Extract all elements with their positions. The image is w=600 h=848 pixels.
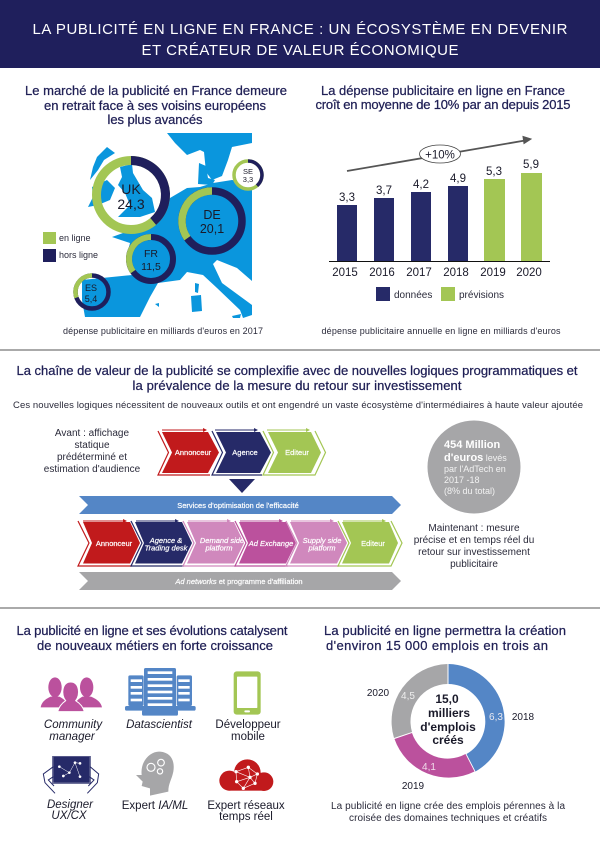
heading: jobs: [324, 623, 566, 653]
bar chart: 4,9: [450, 173, 466, 185]
text: avant: [44, 428, 141, 475]
callout: 454 million: (8% du total): [444, 486, 495, 496]
callout: 454 million: [428, 420, 520, 514]
chevron: Annonceur: [158, 428, 219, 475]
label: network expert: temps réel: [219, 811, 273, 823]
chevron: Supply side platform: [286, 519, 347, 566]
label: community manager: Community: [44, 719, 103, 731]
heading: professions: de nouveaux métiers en forte croissance: [37, 638, 273, 653]
header banner: [0, 0, 600, 68]
icon: datascientist: [125, 668, 196, 716]
donut labels: 2020: [367, 688, 390, 699]
ring: FR: 11,5: [141, 261, 161, 273]
text: maintenant: publicitaire: [450, 559, 498, 570]
ring: FR: [129, 237, 173, 281]
ring: UK: [96, 160, 166, 230]
growth arrow +10%: +10%: [425, 150, 455, 162]
heading: professions: [16, 623, 288, 653]
ring: SE: SE: [243, 167, 253, 176]
ring: UK: UK: [121, 181, 141, 197]
chevron: Ad Exchange: Ad Exchange: [248, 539, 293, 548]
callout: 454 million: 2017 -18: [444, 475, 480, 485]
bar chart: 5,9: [523, 159, 539, 171]
callout: 454 million: par l'AdTech en: [444, 464, 506, 474]
icon: AI head: [136, 752, 174, 796]
chevron: Supply side platform: platform: [307, 544, 336, 552]
map of Europe: [82, 133, 252, 318]
chevron: Agence & Trading desk: Agence &: [149, 536, 182, 545]
heading: market: [25, 83, 287, 127]
caption: bars: dépense publicitaire annuelle en ligne en milliards d'euros: [322, 326, 561, 336]
header banner: ET CRÉATEUR DE VALEUR ÉCONOMIQUE: [142, 42, 458, 59]
panel: new professions: [16, 623, 288, 823]
chain: after: [78, 519, 402, 566]
text: avant: Avant : affichage: [55, 428, 129, 439]
heading: market: Le marché de la publicité en France demeure: [25, 83, 287, 98]
chevron: Agence & Trading desk: [131, 519, 192, 566]
caption: map: dépense publicitaire en milliards d'euros en 2017: [63, 326, 263, 336]
icon: network cloud: [219, 759, 273, 791]
caption: donut: croisée des domaines techniques et créatifs: [349, 813, 547, 824]
donut chart: 6,3: [489, 712, 503, 723]
bar chart: 2016: [369, 267, 395, 279]
ring: ES: ES: [85, 283, 97, 293]
bar chart: 2015: [332, 267, 358, 279]
donut labels: [367, 688, 535, 792]
heading: professions: La publicité en ligne et ses évolutions catalysent: [16, 623, 288, 638]
icon: community manager: [41, 677, 102, 712]
chevron: Editeur: Editeur: [361, 539, 385, 548]
legend: bars: prévisions: [459, 290, 504, 301]
legend: map: hors ligne: [59, 250, 98, 260]
chevron: Demand side platform: Demand side: [200, 536, 244, 545]
ring: DE: DE: [203, 208, 221, 222]
label: network expert: Expert réseaux: [207, 800, 285, 812]
header banner: LA PUBLICITÉ EN LIGNE EN FRANCE : UN ÉCOSYSTÈME EN DEVENIR: [32, 21, 568, 38]
heading: jobs: d'environ 15 000 emplois en trois an: [326, 638, 548, 653]
bar chart: 3,3: [339, 192, 355, 204]
ring: SE: 3,3: [243, 175, 253, 184]
bar chart: 5,3: [486, 166, 502, 178]
donut labels: 2018: [512, 712, 535, 723]
donut chart: milliers: [428, 706, 470, 720]
caption: donut: La publicité en ligne crée des emplois pérennes à la: [331, 801, 565, 812]
chevron: Editeur: [338, 519, 402, 566]
donut labels: 2019: [402, 781, 425, 792]
ring: DE: 20,1: [200, 222, 224, 236]
label: datascientist: Datascientist: [126, 719, 193, 731]
heading: market: en retrait face à ses voisins européens: [44, 98, 266, 113]
donut chart: 4,5: [401, 691, 415, 702]
callout: 454 million: d'euros levés: [444, 452, 507, 464]
ring: UK: 24,3: [117, 196, 145, 212]
subheading: value chain: Ces nouvelles logiques nécessitent de nouveaux outils et ont engendré un vaste écosystème d'intermédiaires à haute valeur ajoutée: [13, 400, 583, 411]
ring: FR: FR: [144, 248, 158, 260]
bar chart: 4,2: [413, 179, 429, 191]
chevron: Agence: [212, 428, 271, 475]
label: AI expert: Expert IA/ML: [122, 800, 188, 812]
chevron: Agence: Agence: [232, 448, 258, 457]
chevron: Editeur: Editeur: [285, 448, 309, 457]
chevron: Supply side platform: Supply side: [303, 536, 341, 545]
legend: map: [43, 232, 98, 262]
label: mobile: Développeur: [215, 719, 281, 731]
text: avant: estimation d'audience: [44, 464, 141, 475]
donut chart: [392, 664, 505, 778]
band: optimisation services: [79, 496, 401, 514]
legend: map: en ligne: [59, 233, 91, 243]
ring: ES: [76, 276, 108, 308]
bar chart: 2018: [443, 267, 469, 279]
bar chart: 2020: [516, 267, 542, 279]
callout: 454 million: 454 Million: [444, 439, 501, 451]
panel: jobs donut: [324, 623, 566, 824]
chevron: Editeur: [263, 428, 326, 475]
band: ad networks: [79, 572, 401, 590]
label: designer: Designer: [47, 799, 94, 811]
chevron: Ad Exchange: [235, 519, 296, 566]
panel: spending bar chart: [316, 83, 570, 336]
heading: value chain: la prévalence de la mesure du retour sur investissement: [132, 378, 462, 393]
text: avant: statique: [74, 440, 110, 451]
label: community manager: manager: [49, 731, 96, 743]
band: optimisation services: Services d'optimisation de l'efficacité: [177, 501, 299, 510]
label: designer: [47, 799, 94, 822]
legend: bars: données: [394, 290, 432, 301]
label: mobile: mobile: [231, 731, 265, 743]
label: network expert: [207, 800, 285, 823]
caption: donut: [331, 801, 565, 824]
band: ad networks: Ad networks et programme d'affiliation: [174, 577, 303, 586]
heading: value chain: [16, 363, 578, 393]
label: designer: UX/CX: [51, 810, 88, 822]
chain: before: [158, 428, 326, 475]
growth arrow +10%: [347, 136, 531, 171]
donut chart: 4,1: [422, 762, 436, 773]
icon: designer tablet: [43, 756, 99, 793]
label: mobile: [215, 719, 281, 743]
chevron: Annonceur: [78, 519, 140, 566]
text: maintenant: retour sur investissement: [418, 547, 530, 558]
chevron: Demand side platform: [183, 519, 244, 566]
ring: DE: [182, 191, 242, 251]
heading: spending: croît en moyenne de 10% par an depuis 2015: [316, 97, 570, 112]
chevron: Agence & Trading desk: Trading desk: [145, 544, 189, 552]
heading: spending: [316, 83, 570, 112]
bar chart: 2017: [406, 267, 432, 279]
text: avant: prédéterminé et: [57, 452, 127, 463]
label: community manager: [44, 719, 103, 743]
panel: European market map: [25, 83, 287, 336]
heading: market: les plus avancés: [108, 112, 203, 127]
chevron: Annonceur: Annonceur: [175, 448, 212, 457]
icon: mobile: [234, 671, 261, 715]
donut chart: créés: [432, 733, 464, 747]
panel: value chain: [13, 363, 583, 590]
ring: SE: [234, 161, 262, 189]
donut chart: d'emplois: [420, 720, 476, 734]
chevron: Demand side platform: platform: [204, 544, 233, 552]
legend: bars: [376, 287, 504, 301]
bar chart: [329, 159, 550, 279]
text: maintenant: [414, 523, 534, 570]
bar chart: 3,7: [376, 185, 392, 197]
heading: spending: La dépense publicitaire en ligne en France: [321, 83, 565, 98]
arrow: transition down: [229, 479, 255, 493]
text: maintenant: précise et en temps réel du: [414, 535, 534, 546]
ring: ES: 5,4: [85, 294, 97, 304]
heading: value chain: La chaîne de valeur de la publicité se complexifie avec de nouvelles logiques programmatiques et: [16, 363, 578, 378]
bar chart: 2019: [480, 267, 506, 279]
heading: jobs: La publicité en ligne permettra la création: [324, 623, 566, 638]
donut chart: 15,0: [435, 692, 459, 706]
chevron: Annonceur: Annonceur: [96, 539, 133, 548]
text: maintenant: Maintenant : mesure: [428, 523, 520, 534]
